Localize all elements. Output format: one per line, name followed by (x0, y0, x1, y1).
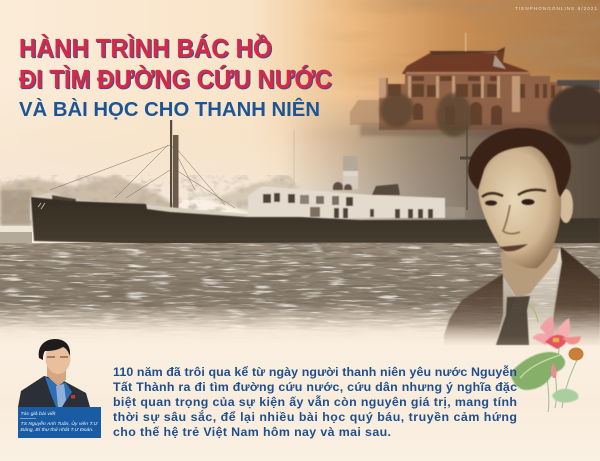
author neck (47, 366, 66, 386)
lotus flower (532, 316, 581, 349)
intro paragraph: cho thế hệ trẻ Việt Nam hôm nay và mai sau. (113, 425, 391, 439)
hull marking (38, 203, 45, 209)
portrait coat left (444, 274, 515, 345)
ship hull (31, 197, 600, 244)
title line 3: VÀ BÀI HỌC CHO THANH NIÊN (19, 97, 320, 121)
author photo (18, 339, 90, 407)
author caption name: TS Nguyễn Anh Tuấn, Ủy viên T.Ư (20, 420, 99, 427)
author hair (39, 339, 70, 360)
author caption name: Đảng, Bí thư thứ nhất T.Ư Đoàn. (20, 426, 94, 433)
lotus stems (547, 340, 577, 412)
author glasses (47, 356, 68, 358)
portrait nose and mouth (499, 205, 528, 251)
building: Nha Rong wharf (350, 33, 600, 130)
title line 2: ĐI TÌM ĐƯỜNG CỨU NƯỚC (19, 64, 332, 94)
intro paragraph: thời sự sâu sắc, để lại nhiều bài học quý báu, truyền cảm hứng (113, 409, 517, 424)
author collar (45, 377, 72, 407)
bottom cream panel (0, 335, 600, 461)
intro paragraph: 110 năm đã trôi qua kể từ ngày người thanh niên yêu nước Nguyễn (113, 364, 517, 379)
intro paragraph: Tất Thành ra đi tìm đường cứu nước, cứu dân nhưng ý nghĩa đặc (113, 380, 517, 394)
lotus bud (551, 363, 557, 378)
title line 1: HÀNH TRÌNH BÁC HỒ (19, 33, 272, 63)
portrait ear (559, 189, 573, 223)
lotus small bud stem (529, 304, 538, 322)
lotus illustration (510, 304, 584, 412)
trees in front of building (360, 85, 600, 145)
ship funnel (333, 156, 400, 195)
background sky (0, 0, 600, 243)
source and date: TIENPHONGONLINE 6/2021 (515, 6, 597, 11)
intro paragraph: biệt quan trọng của sự kiện ấy vẫn còn nguyên giá trị, mang tính (113, 394, 517, 409)
portrait hair (468, 128, 571, 197)
ship deck cargo (30, 192, 248, 220)
ship rigging (50, 120, 472, 210)
ship (30, 120, 600, 244)
author caption label: Tác giả bài viết (20, 410, 56, 417)
water (0, 243, 600, 355)
ship superstructure (248, 186, 465, 218)
lotus leaf large (510, 352, 565, 390)
portrait face (477, 146, 561, 268)
distant hills and town (0, 175, 300, 243)
lotus seed pod (568, 348, 584, 360)
lotus leaf small (552, 389, 578, 403)
author jacket (18, 376, 90, 407)
portrait shirt (495, 248, 562, 345)
author badge (71, 395, 75, 398)
intro paragraph (113, 364, 517, 439)
author caption name (20, 420, 99, 433)
title (19, 33, 333, 121)
title line 1: HÀNH TRÌNH BÁC HỒ (20, 34, 273, 64)
portrait (444, 128, 600, 345)
title line 2: ĐI TÌM ĐƯỜNG CỨU NƯỚC (20, 65, 333, 95)
portrait coat right (545, 247, 600, 345)
author face (46, 342, 70, 374)
portrait eyes and brows (482, 190, 546, 206)
author caption box (18, 407, 101, 438)
portrait tie (496, 296, 530, 345)
author shirt and tie (56, 384, 66, 407)
portrait neck (500, 248, 560, 297)
